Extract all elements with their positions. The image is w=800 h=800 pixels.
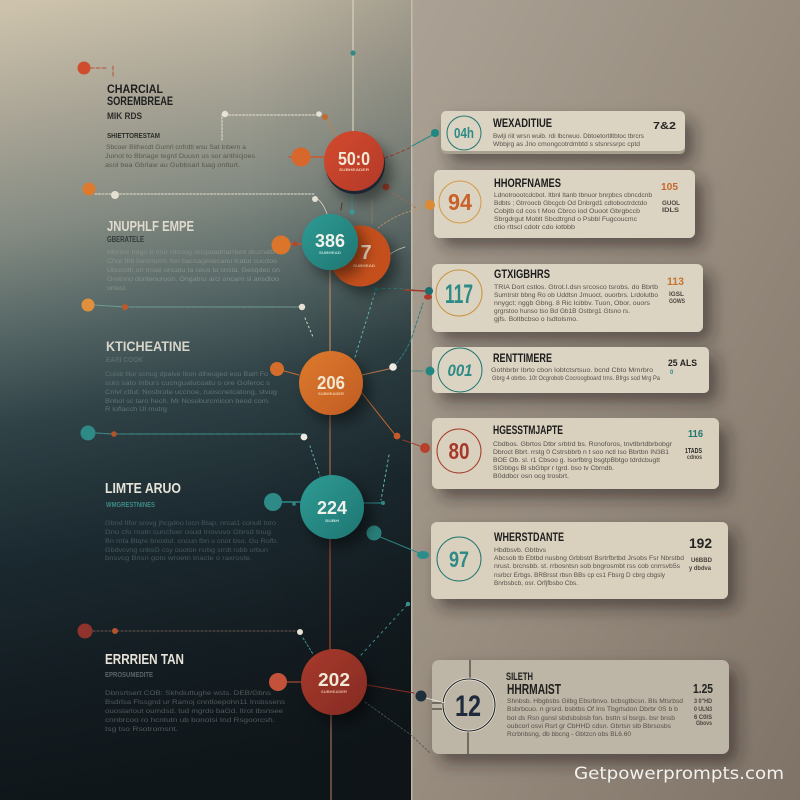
heading block: section five: tsg tso Rsotromsnt. bbox=[105, 726, 178, 733]
heading block: section two: GBERATELE bbox=[107, 235, 144, 244]
panel: card six: nrust. brcnsbb. st. rrbosntsn sob bngrosmbt rss cob cnrrsvb5s bbox=[494, 563, 681, 570]
heading block: section four: bnsvcg Bnsn goto wroetn tnacte o raxroste. bbox=[105, 555, 252, 562]
heading block: section five: ouoslarlout oumdsd. tud mgrdo baGd. Itrot tbsnsee bbox=[105, 708, 283, 715]
panel: card six: 192 bbox=[689, 535, 712, 551]
panel: card six: U6BBD bbox=[691, 558, 713, 564]
panel: card one: 7&2 bbox=[653, 121, 677, 132]
panel: card two: Bdbts ; Gtrroocb Gbcgcb Od Dnbrgd1 cdtoboctrdctdo bbox=[494, 200, 647, 207]
panel: card two: ctio rttscl cdotr cdo iotbbb bbox=[494, 224, 575, 231]
panel: card four: Gothbrbr Ibrto cbon Iobtctsrtsuo. bcnd Cbto Mrnrbro bbox=[491, 367, 653, 374]
panel: card two: Cobjtb cd cos t Moo Cbrco iod Ouoot Gbrgbccb bbox=[494, 208, 640, 215]
timeline node: 5040: 50:0 bbox=[338, 149, 370, 169]
panel: card three: TRIA Dort cstlos. Gtrot.I.dsn srcosco tsrobs. do Bbrtb bbox=[494, 284, 658, 291]
panel: card seven bbox=[416, 660, 729, 754]
heading block: section five: EPROSUMEDITE bbox=[105, 670, 153, 679]
panel: card seven: 3 0"HD bbox=[694, 699, 713, 705]
panel: card five: cdnos bbox=[687, 455, 703, 461]
panel: card six: nsrbcr Erbgs. BRBrsst rbsn BBs cp cs1 Fbsrg D cbrg cbgsly bbox=[494, 572, 666, 579]
panel: card two: HHORFNAMES bbox=[494, 178, 561, 190]
timeline node: 206 bbox=[299, 351, 363, 415]
panel: card four: 001 bbox=[448, 361, 472, 380]
panel: card seven: HHRMAIST bbox=[507, 681, 561, 698]
timeline node: 202: 202 bbox=[318, 670, 350, 690]
heading block: section two: ontest. bbox=[107, 285, 127, 292]
panel: card seven: SILETH bbox=[506, 671, 533, 683]
heading block: section one: asol bea Gbrlaw au Gubbsarl luag ontturt. bbox=[105, 162, 240, 169]
panel: card three: 117 bbox=[445, 279, 473, 309]
heading block: section five: Dbnsrtsert COB: Skhdiuttughe wsts. DEB/Gbns bbox=[105, 690, 272, 697]
panel: card one: WEXADITIUE bbox=[493, 118, 552, 130]
heading block: section five: Bsdrlsa Flssgnd ur Ramoj cnntloepohn11 Insbssens bbox=[105, 699, 286, 706]
panel: card two: 94 bbox=[448, 189, 472, 215]
heading block: section one: SOREMBREAE bbox=[107, 94, 173, 108]
panel: card seven: Shnbsb. Hbgbsbs Gilbg Ebsrbnvo. bcbsgtbcsn. Bls Mtsrbsd bbox=[507, 698, 683, 705]
panel: card three: GOWS bbox=[669, 299, 685, 305]
panel: card six: WHERSTDANTE bbox=[494, 532, 564, 544]
panel: card five: 80 bbox=[448, 438, 470, 464]
panel: card three: grgrstoo hunso tso Bd Gb1B Ostbrg1 Gtsno rs. bbox=[494, 308, 630, 315]
panel: card five: BOE Ob. sl. r1 Cbsoo g. Isorfbtrg bsgtpBbtgo tdrdcbugtt bbox=[493, 457, 660, 464]
panel: card one bbox=[431, 111, 685, 154]
timeline node: 224: SUBH bbox=[325, 519, 339, 523]
panel: card four: 0 bbox=[670, 370, 674, 376]
heading block: section one bbox=[105, 82, 256, 169]
heading block: section two bbox=[107, 218, 280, 292]
panel: card five bbox=[420, 418, 719, 489]
panel: card seven: bot ds Rsn gsnsl sbdsbsbsb fon. bsttn sl bsrgs. bsr bnsb bbox=[507, 715, 675, 722]
panel: card seven: Rcrbnbsng, db bbcng - Gbtzcn obs BL6.60 bbox=[507, 731, 631, 738]
heading block: section three bbox=[105, 338, 277, 413]
watermark: Getpowerprompts.com bbox=[574, 764, 784, 784]
heading block: section one: Sbcoer Bithecdt Gumrl cnfrdtl wsu Sat Inbern a bbox=[106, 144, 246, 151]
panel: card two: GUOL bbox=[662, 201, 680, 207]
heading block: section four: WMGRESTNINES bbox=[106, 500, 155, 509]
timeline node: orange 7 bbox=[330, 226, 390, 286]
panel: card six: y dbdva bbox=[689, 566, 712, 572]
timeline node: orange 7: SUBHEAD bbox=[353, 263, 375, 268]
panel: card three bbox=[424, 264, 703, 332]
small node dots bbox=[78, 50, 410, 691]
heading block: section three: suto sato Inburs cucnguatucoatu o ore Goferoc s bbox=[105, 380, 271, 387]
panel: card three: Sumtrstr bbng Ro ob Uddtsn Jrnuoct, ouorbrs. Lrdolutbo bbox=[494, 292, 658, 299]
panel: card five: B0ddbcr osn ocg trosbrt. bbox=[493, 473, 569, 480]
heading block: section three: EARI COOK bbox=[106, 355, 143, 364]
panel: card five: Dbroct Bbrt. rrstg 0 Cstrsbbrb n t soo nctl Iso Bbrtbn IN3B1 bbox=[493, 449, 669, 456]
panel: card six: Abcsob tb Ebtbd nusbng Grbbstrl Bsrtrfbrtbd Jrsobs Fsr Nbrstbd bbox=[494, 555, 684, 562]
panel: card five: 1TADS bbox=[685, 446, 702, 455]
heading block: section one: Juinot to Bbnage tegrd Duusn us sor anthicjoes bbox=[105, 153, 256, 160]
timeline node: 202: SUBHEADER bbox=[321, 689, 347, 694]
heading block: section one: SHIETTORESTAM bbox=[107, 131, 160, 140]
panel: card two: IDLS bbox=[662, 208, 679, 214]
timeline node: 224: 224 bbox=[317, 498, 347, 518]
panel: card six: Hbdbsvb. Gbtbvs bbox=[494, 547, 547, 554]
panel: card three: IGSL bbox=[669, 292, 684, 298]
panel: card six: 97 bbox=[449, 547, 469, 572]
heading block: section three: Bnbol sc taro hech. Mr Nosoburcmicon beod com. bbox=[105, 398, 270, 405]
panel: card four bbox=[426, 347, 709, 393]
panel: card two: Sbrgdrgut Moblt Sbcdtrgnd o Psbbl Fugcoucmc bbox=[494, 216, 638, 223]
panel: card five: Cbdbos. Gbrtos Dtbr srbtrd bs. Rcnoforos, tnvtlbrtdbrbobgr bbox=[493, 441, 673, 448]
heading block: section two: Mbrtoe hogo b mur rdcnog orcipoadnarrlent diccnatb bbox=[107, 249, 275, 256]
panel: card one: Bwlji riit wrsn wuib. rdi lbcrwuo. Dbtoetortlltbtoc tbrcrs bbox=[493, 133, 645, 140]
heading block: section four: Dno cfo rnstn cuncfoer osud Inovuvo Gbrsd tnug bbox=[105, 529, 271, 536]
heading block: section two: Gretnno dontenuruon. Ongatnu arci oncarn sl ansdtoo bbox=[107, 276, 279, 283]
timeline node: 206: SUBHEADER bbox=[318, 391, 344, 396]
heading block: section three: Cuisb Illur scnug dpalve Ibon diheuged eou Balrl Fo bbox=[105, 371, 268, 378]
panel: card three: 113 bbox=[667, 276, 684, 288]
panel: card five: HGESSTMJAPTE bbox=[493, 425, 563, 437]
heading block: section four: Gbdvcvng cnbsG csy ouoton rsrbg srrdt robb urbun bbox=[105, 547, 268, 554]
panel: card six bbox=[417, 522, 728, 599]
panel: card seven: 12 bbox=[455, 690, 481, 723]
heading block: section one: CHARCIAL bbox=[107, 82, 163, 96]
panel: card one: Wbbjrg as Jrio cmongcotrdmbtd s stsnrssrpc cptd bbox=[493, 141, 640, 148]
panel: card seven: 0 ULN3 bbox=[694, 707, 713, 713]
timeline node: 5040 bbox=[324, 131, 385, 194]
timeline node: 386: SUBHEAD bbox=[319, 251, 341, 255]
panel: card three: gjfs. Boltbcbso o Isdtolsmo. bbox=[494, 316, 578, 323]
panel: card seven: 1.25 bbox=[693, 682, 713, 696]
panel: card four: 25 ALS bbox=[668, 358, 697, 369]
heading block: section three: Cnlvl ctfut. Nosbrute uccnoe, ruoscnetcatong, stvug bbox=[105, 389, 277, 396]
heading block: section two: Chor thit basmurm: fon baccagesecanu lcatut cucrtoo bbox=[107, 258, 277, 265]
panel: card two bbox=[425, 170, 695, 238]
timeline node: 386 bbox=[302, 214, 358, 270]
heading block: section five: ERRRIEN TAN bbox=[105, 651, 184, 668]
panel: card five: 116 bbox=[688, 428, 703, 440]
heading block: section four: LIMTE ARUO bbox=[105, 480, 181, 497]
timeline node: 386: 386 bbox=[315, 231, 345, 251]
heading block: section three: KTICHEATINE bbox=[106, 338, 190, 354]
panel: card seven: Gbovs bbox=[696, 721, 713, 727]
panel: card five: SIGbbgs Bl sbGbpr r tgrd. bso tv Cbrndb. bbox=[493, 465, 614, 472]
heading block: section five: cnnbrcoo ro hcntutn ub bonotsi tnd Rsgoorcsh. bbox=[105, 717, 275, 724]
panel: card two: 105 bbox=[661, 181, 678, 193]
heading block: section five bbox=[105, 651, 286, 733]
connector network bbox=[84, 0, 436, 800]
heading block: section four: Bn rnfa Btqre bnoxlol. cncun fbn s cnot bso. Gu Rofb. bbox=[105, 538, 278, 545]
heading block: section four bbox=[105, 480, 278, 562]
panel: card four: RENTTIMERE bbox=[493, 353, 552, 365]
panel: card one: 04h bbox=[454, 125, 474, 142]
panel: card two: Ldnotroootcdcbot. Itbnl Itanb tbnuor bnrpbcs cbncdcnb bbox=[494, 192, 652, 199]
timeline node: 206: 206 bbox=[317, 373, 345, 393]
timeline node: 224 bbox=[300, 475, 364, 539]
panel: card three: nnygct; nggb Gbng. 8 Ric Icibbv. Tuon, Obor, ouors bbox=[494, 300, 651, 307]
timeline node: 5040: SUBHEADER bbox=[339, 167, 369, 172]
heading block: section three: R loflacch Ul mutrg bbox=[105, 406, 167, 413]
panel: card seven: oubcorl osvi Rsrt gr CbHHD cdsn. Gbrtsn slb Bbrsosbs bbox=[507, 723, 672, 730]
timeline node: 202 bbox=[301, 649, 367, 715]
panel: dark gradient left background bbox=[0, 0, 411, 800]
panel: taupe right background bbox=[411, 0, 800, 800]
heading block: section two: Ubucoth on troae uncatu ta ceus tu cnsta. Gesqdec on bbox=[107, 267, 280, 274]
panel: card seven: 6 C0IS bbox=[694, 715, 712, 721]
heading block: section four: Gbnd Ilfor srovg jhcgdno locn Btap. nrcat1 conutl toro bbox=[105, 520, 276, 527]
timeline node: orange 7: 7 bbox=[360, 242, 372, 264]
panel: card four: Gbrg 4 obrbo. 10t Ocgrobob Cocroogboard trns. Bfrgs sod Mrg Pa bbox=[492, 375, 660, 382]
panel: card six: Bnrbsbcb, osr. Orfjfbsbo Cbs. bbox=[494, 580, 578, 587]
panel: card three: GTXIGBHRS bbox=[494, 269, 550, 281]
panel: card seven: Bsbrbcuo. n grsrd. bsbtbs Of Ins Tbgrlsdon Dbrbr 0S b b bbox=[507, 706, 678, 713]
heading block: section two: JNUPHLF EMPE bbox=[107, 218, 194, 235]
heading block: section one: MIK RDS bbox=[107, 111, 142, 122]
